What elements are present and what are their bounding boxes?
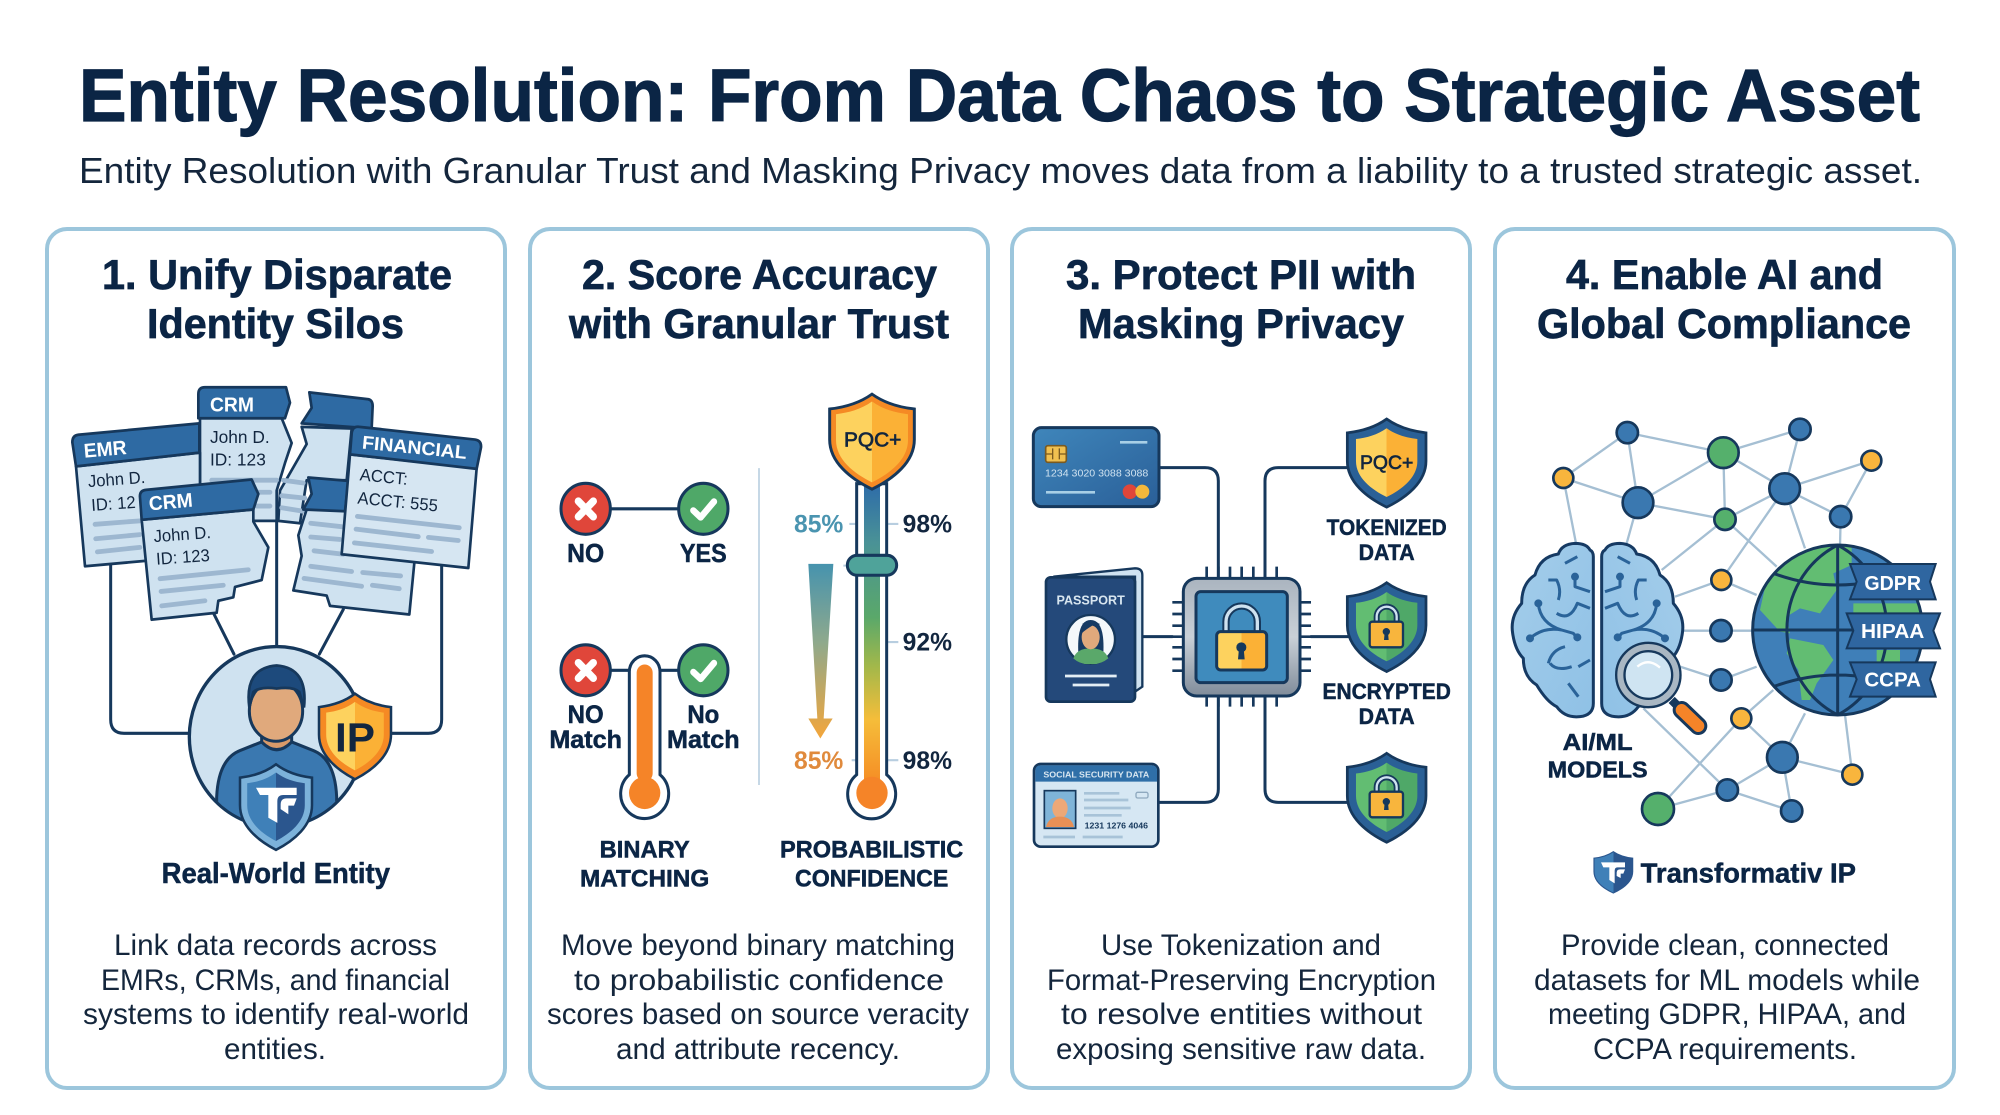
- chart: probabilistic confidence thermometer: 85%: [794, 747, 844, 775]
- illustration: silos to real-world entity: ID: 123: [156, 546, 210, 569]
- illustration: silos to real-world entity: ACCT:: [359, 465, 409, 489]
- body text: panel 4: CCPA requirements.: [1593, 1033, 1857, 1066]
- label: encrypted data: [1322, 679, 1451, 729]
- icon: tokenized shield: PQC+: [1360, 453, 1413, 474]
- icon: credit card: [1033, 428, 1159, 507]
- chart: binary matching yes/no: Match: [549, 727, 622, 754]
- labels: chart captions: CONFIDENCE: [795, 866, 948, 893]
- icon: TF shield logo: [240, 764, 312, 850]
- record: front CRM torn: [140, 480, 268, 620]
- record: EMR: [72, 423, 200, 566]
- icon: globe with regulations: HIPAA: [1861, 621, 1924, 643]
- illustration: silos to real-world entity: John D.: [210, 427, 270, 447]
- body text: panel 4: Provide clean, connected: [1561, 929, 1889, 962]
- title: Entity Resolution: From Data Chaos to Strategic Asset: [79, 54, 1920, 137]
- label: AI/ML models: [1548, 729, 1648, 783]
- panel: protect PII with masking privacy: [1012, 229, 1470, 1088]
- illustration: silos to real-world entity: John D.: [87, 468, 146, 491]
- icon: social security card: SOCIAL SECURITY DATA: [1043, 770, 1150, 780]
- label: encrypted data: ENCRYPTED: [1322, 679, 1451, 704]
- subtitle: Entity Resolution with Granular Trust and Masking Privacy moves data from a liability to a trusted strategic asset.: [79, 150, 1922, 191]
- icon: secure chip with padlock: [1172, 567, 1311, 707]
- connector lines: [1142, 468, 1352, 802]
- entity circle with person: [189, 647, 364, 831]
- body text: panel 3: to resolve entities without: [1061, 998, 1423, 1031]
- icon: globe with regulations: CCPA: [1864, 670, 1921, 692]
- network edges: [1563, 429, 1871, 811]
- icon: magnifying glass: [1620, 647, 1698, 726]
- label: AI/ML models: AI/ML: [1563, 729, 1633, 755]
- labels: chart captions: PROBABILISTIC: [780, 837, 963, 863]
- icon: social security card: 1231 1276 4046: [1085, 821, 1149, 830]
- heading: panel 3: Masking Privacy: [1078, 300, 1405, 347]
- illustration: silos to real-world entity: EMR: [83, 437, 128, 463]
- chart: probabilistic confidence thermometer: 85%: [794, 511, 844, 539]
- body text: panel 4: meeting GDPR, HIPAA, and: [1548, 998, 1906, 1031]
- record: FINANCIAL: [342, 427, 481, 568]
- body text: panel 2: [547, 929, 969, 1066]
- chart: binary thermometer: [621, 656, 669, 819]
- label: encrypted data: DATA: [1359, 704, 1415, 729]
- chart: binary matching yes/no: NO: [567, 540, 604, 568]
- body text: panel 1: entities.: [224, 1033, 326, 1066]
- body text: panel 3: Format-Preserving Encryption: [1047, 964, 1436, 997]
- heading: panel 2: [568, 251, 949, 347]
- connector lines: [111, 518, 442, 733]
- body text: panel 2: to probabilistic confidence: [574, 964, 944, 997]
- icon: social security card: [1034, 764, 1158, 847]
- body text: panel 3: [1047, 929, 1436, 1066]
- labels: chart captions: BINARY: [600, 837, 690, 863]
- label: AI/ML models: MODELS: [1548, 757, 1648, 783]
- icon: PQC+ shield: PQC+: [844, 429, 901, 452]
- body text: panel 2: scores based on source veracity: [547, 998, 969, 1031]
- illustration: binary vs probabilistic: [549, 394, 963, 893]
- body text: panel 1: [83, 929, 469, 1066]
- heading: panel 1: [102, 251, 452, 347]
- label: real-world entity: Real-World Entity: [162, 858, 390, 890]
- chart: binary matching yes/no: NO: [568, 702, 604, 729]
- panel: enable AI and global compliance: [1495, 229, 1954, 1088]
- body text: panel 1: systems to identify real-world: [83, 998, 469, 1031]
- logo: Transformativ IP: [1594, 852, 1856, 893]
- illustration: silos to real-world entity: John D.: [153, 523, 212, 546]
- icon: lower shield: [1347, 753, 1426, 842]
- icon: credit card: 1234 3020 3088 3088: [1045, 468, 1148, 479]
- heading: panel 1: Identity Silos: [147, 300, 404, 347]
- heading: panel 3: [1066, 251, 1416, 347]
- body text: panel 2: and attribute recency.: [616, 1033, 900, 1066]
- chart: binary matching yes/no: Match: [667, 727, 740, 754]
- label: tokenized data: DATA: [1359, 540, 1415, 565]
- record: top CRM torn: [198, 387, 373, 523]
- network nodes: [1553, 419, 1881, 825]
- chart: probabilistic confidence thermometer: 98%: [903, 747, 952, 775]
- label: tokenized data: TOKENIZED: [1327, 515, 1447, 540]
- icon: globe with regulations: [1753, 545, 1940, 715]
- icon: globe with regulations: GDPR: [1864, 573, 1922, 595]
- body text: panel 4: datasets for ML models while: [1534, 964, 1920, 997]
- icon: encrypted shield: [1347, 583, 1426, 672]
- arrow: confidence gradient: [808, 564, 833, 738]
- label: tokenized data: [1327, 515, 1447, 565]
- icon: tokenized shield: [1347, 419, 1426, 507]
- chart: probabilistic confidence thermometer: 92%: [903, 629, 952, 657]
- record: lower right torn: [293, 477, 415, 615]
- logo: Transformativ IP: Transformativ IP: [1641, 858, 1856, 889]
- chart: binary matching yes/no: No: [687, 702, 719, 729]
- illustration: silos to real-world entity: ID: 12: [91, 493, 136, 515]
- heading: panel 4: Global Compliance: [1537, 300, 1911, 347]
- icon: passport: PASSPORT: [1056, 592, 1125, 607]
- illustration: silos to real-world entity: ID: 123: [210, 449, 266, 470]
- illustration: silos to real-world entity: [72, 387, 481, 890]
- heading: panel 2: 2. Score Accuracy: [582, 251, 938, 298]
- illustration: silos to real-world entity: IP: [335, 716, 375, 761]
- body text: panel 1: EMRs, CRMs, and financial: [101, 964, 450, 997]
- body text: panel 3: exposing sensitive raw data.: [1056, 1033, 1426, 1066]
- chart: binary matching yes/no: YES: [680, 540, 727, 568]
- heading: panel 4: [1537, 251, 1911, 347]
- body text: panel 2: Move beyond binary matching: [561, 929, 955, 962]
- icon: IP shield: [319, 694, 391, 779]
- chart: probabilistic confidence thermometer: [794, 484, 952, 819]
- labels: chart captions: [580, 837, 963, 893]
- illustration: AI and compliance network: [1512, 419, 1940, 893]
- icon: PQC+ shield: [830, 394, 914, 489]
- chart: probabilistic confidence thermometer: 98%: [903, 511, 952, 539]
- body text: panel 1: Link data records across: [114, 929, 437, 962]
- body text: panel 4: [1534, 929, 1920, 1066]
- illustration: silos to real-world entity: FINANCIAL: [361, 431, 468, 463]
- panel: score accuracy with granular trust: [530, 229, 988, 1088]
- illustration: silos to real-world entity: ACCT: 555: [357, 488, 439, 516]
- illustration: masking pipeline: [1033, 419, 1451, 847]
- illustration: silos to real-world entity: CRM: [148, 489, 194, 516]
- panel: unify disparate identity silos: [47, 229, 505, 1088]
- body text: panel 3: Use Tokenization and: [1101, 929, 1381, 962]
- heading: panel 2: with Granular Trust: [568, 300, 949, 347]
- heading: panel 4: 4. Enable AI and: [1566, 251, 1883, 298]
- icon: passport: [1046, 568, 1142, 702]
- heading: panel 1: 1. Unify Disparate: [102, 251, 452, 298]
- illustration: silos to real-world entity: CRM: [210, 394, 254, 416]
- labels: chart captions: MATCHING: [580, 866, 709, 893]
- heading: panel 3: 3. Protect PII with: [1066, 251, 1416, 298]
- chart: binary matching yes/no: [549, 483, 740, 754]
- brain icon: [1512, 543, 1683, 717]
